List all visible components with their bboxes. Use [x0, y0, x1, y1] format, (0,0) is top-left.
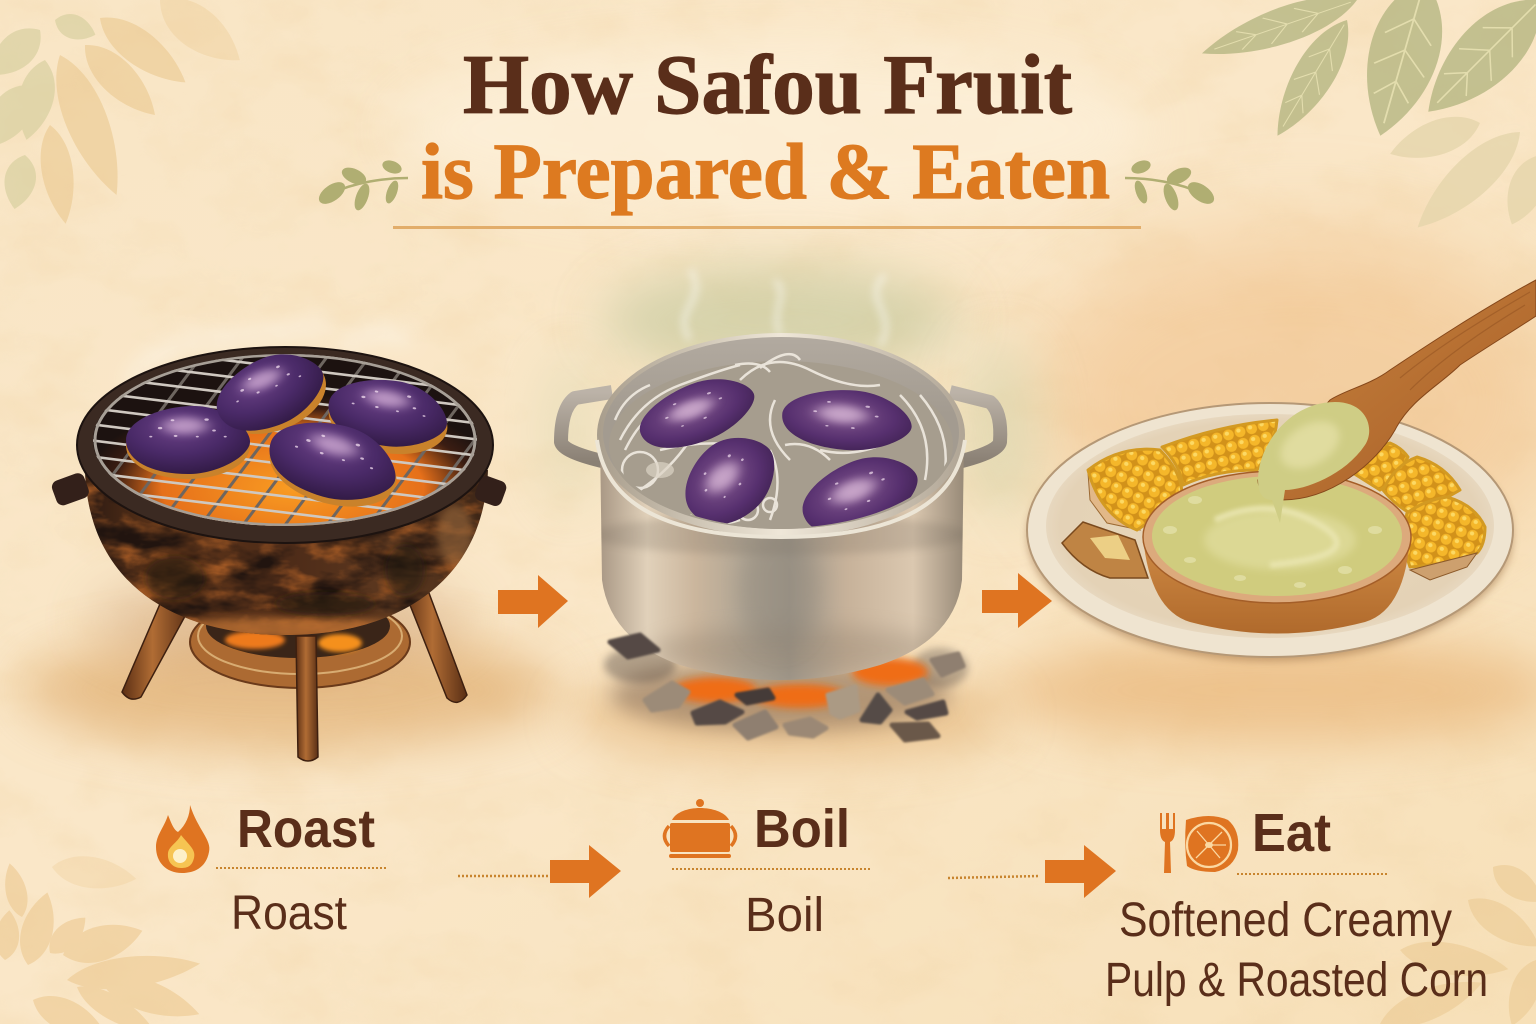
label: Softened Creamy: Softened Creamy [1119, 894, 1452, 947]
clay bowl [1143, 471, 1411, 634]
title [421, 38, 1110, 216]
fruit on grill [126, 339, 453, 520]
foam [615, 354, 946, 524]
steam above pot [684, 270, 886, 345]
icon: left sprig [315, 158, 408, 212]
rim front highlight [597, 440, 965, 537]
step: roast [156, 799, 388, 940]
pot body [600, 440, 964, 680]
steam above grill [130, 320, 410, 385]
arrow: roast to boil [458, 845, 621, 898]
corn left stub [1088, 473, 1140, 530]
pot rim [597, 333, 965, 537]
icon: pot [664, 799, 736, 858]
arrow: pot to plate [982, 573, 1052, 628]
decorative leaves: top left [0, 0, 252, 226]
grill bowl [80, 470, 495, 640]
grill handles [50, 471, 508, 508]
boiling water [609, 361, 953, 529]
pot patina [591, 515, 971, 674]
decorative leaves: bottom left [0, 852, 204, 1024]
icon: right sprig [1125, 158, 1218, 212]
roasted husk piece [1062, 522, 1148, 578]
decorative leaves: right faint [1385, 107, 1536, 242]
grate wires [93, 354, 477, 526]
arrow: boil to eat [948, 845, 1116, 898]
illustration: roast on grill [50, 320, 546, 761]
pulp on spoon [1258, 402, 1369, 523]
step: boil [664, 799, 872, 942]
decorative leaves: bottom right [1374, 856, 1536, 1024]
creamy pulp [1152, 476, 1402, 596]
icon: fork and plate [1160, 813, 1238, 873]
decorative leaves: top right [1196, 0, 1536, 146]
roasted corn [1088, 420, 1485, 567]
title line 1: How Safou Fruit [463, 38, 1072, 132]
illustration: eat plate [1027, 280, 1536, 661]
charcoal ring under grill [190, 594, 410, 688]
title line 2: is Prepared & Eaten [421, 129, 1110, 216]
corn cob stub [1410, 553, 1477, 580]
arrow: grill to pot [498, 575, 568, 628]
label: Roast: Roast [231, 887, 347, 940]
label: Boil: Boil [745, 889, 824, 942]
grill legs [122, 585, 467, 702]
fruit in pot [640, 379, 918, 526]
charcoal pieces [610, 635, 963, 740]
heading: Boil: Boil [754, 799, 850, 859]
front leg [296, 636, 318, 761]
heading: Roast: Roast [237, 799, 375, 859]
plate [1027, 403, 1513, 661]
glowing coals [93, 354, 477, 526]
step: eat [1105, 803, 1488, 1007]
heading: Eat: Eat [1252, 803, 1331, 863]
pot handles [561, 392, 1000, 462]
wooden spoon [1258, 280, 1536, 500]
illustration: boil in pot [561, 270, 1000, 740]
ash and ember glow [604, 647, 968, 731]
title underline [393, 226, 1141, 229]
icon: flame [156, 805, 209, 873]
grill rim [77, 347, 493, 543]
